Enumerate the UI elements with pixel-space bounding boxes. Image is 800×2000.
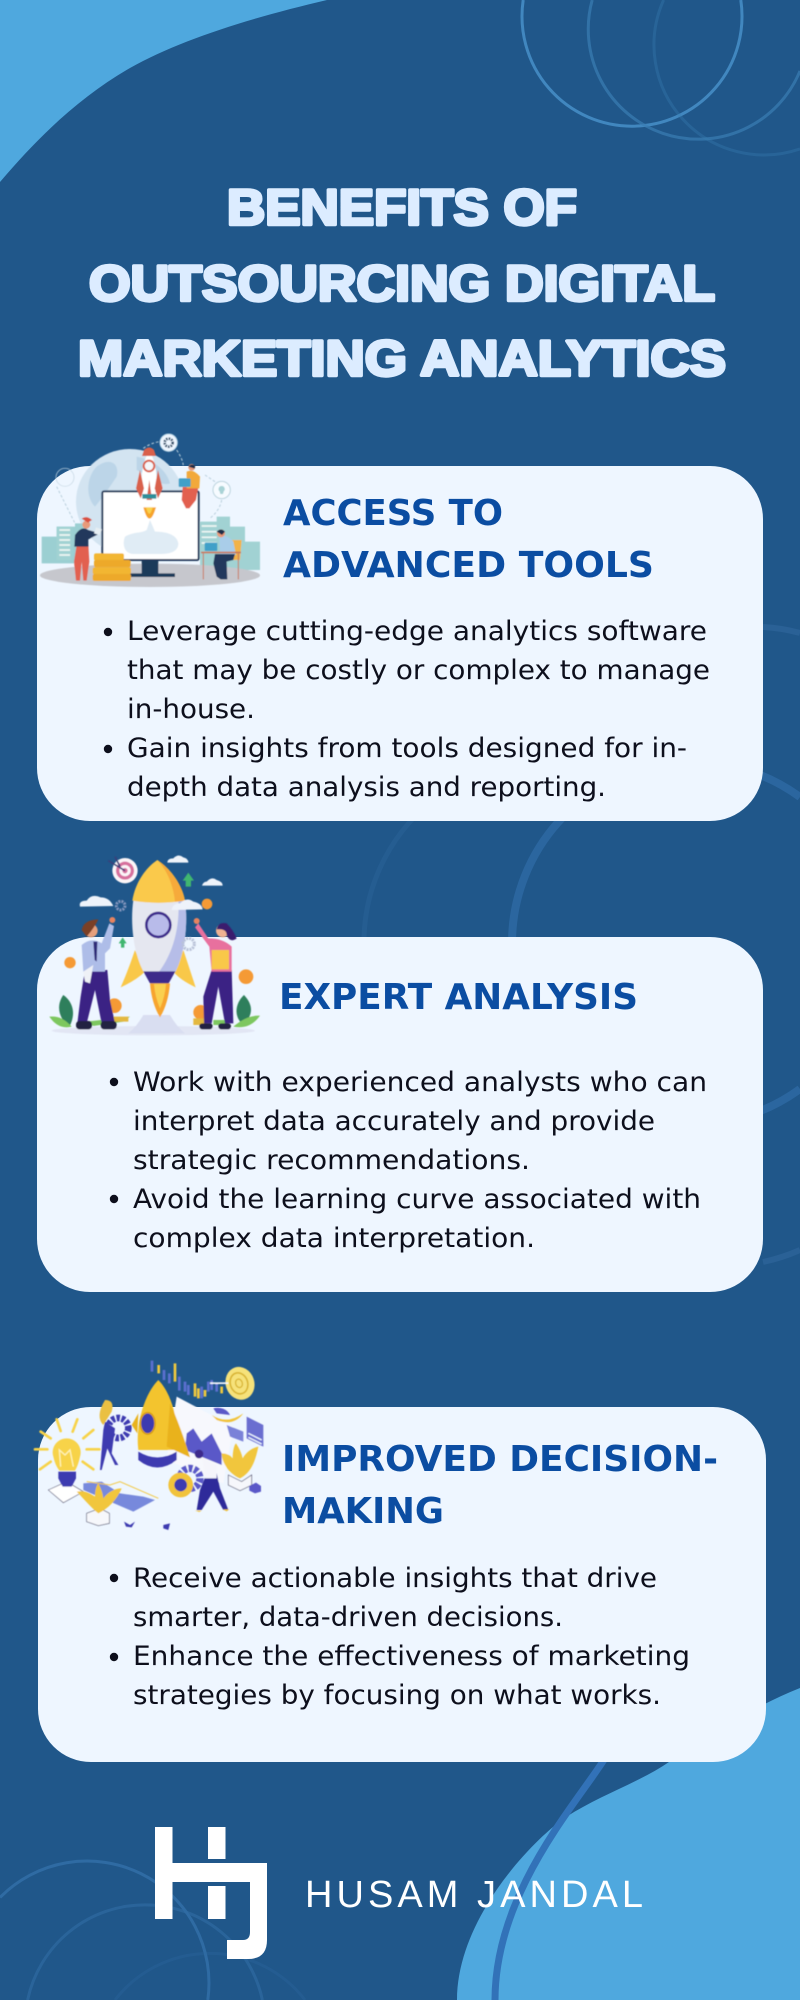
bullet list: [110, 1563, 690, 1711]
bullet list: smarter, data-driven decisions.: [133, 1602, 563, 1633]
card background: [37, 466, 763, 821]
top left blob: [0, 0, 327, 182]
middle background rings: [364, 627, 800, 1262]
blob stripe: [495, 1755, 607, 2000]
top right rings: [522, 0, 800, 155]
bullet list: [104, 616, 710, 803]
bullet list: [110, 1067, 707, 1254]
panel: improved decision-making: [35, 1361, 766, 1762]
bullet list: Gain insights from tools designed for in-: [127, 733, 687, 764]
card background: [37, 937, 763, 1292]
heading: [283, 493, 654, 586]
bullet list: that may be costly or complex to manage: [127, 655, 710, 686]
bullet list: Receive actionable insights that drive: [133, 1563, 657, 1594]
title: [78, 180, 726, 386]
logo wordmark: HUSAM JANDAL: [305, 1874, 643, 1916]
card background: [38, 1407, 766, 1762]
bullet list: strategies by focusing on what works.: [133, 1680, 661, 1711]
heading: EXPERT ANALYSIS: [279, 977, 638, 1018]
bullet list: Avoid the learning curve associated with: [133, 1184, 701, 1215]
heading: IMPROVED DECISION-: [282, 1439, 718, 1480]
illustration: rocket launching from monitor: [40, 434, 260, 587]
title: MARKETING ANALYTICS: [78, 330, 726, 386]
bottom right blob: [457, 1688, 800, 2000]
bullet list: Enhance the effectiveness of marketing: [133, 1641, 690, 1672]
illustration: team with rocket: [49, 856, 260, 1035]
bullet list: strategic recommendations.: [133, 1145, 530, 1176]
title: OUTSOURCING DIGITAL: [89, 256, 715, 312]
logo: [155, 1827, 643, 1959]
heading: [282, 1439, 718, 1532]
bullet list: interpret data accurately and provide: [133, 1106, 655, 1137]
bullet list: in-house.: [127, 694, 255, 725]
heading: ACCESS TO: [283, 493, 503, 534]
panel: access to advanced tools: [37, 434, 763, 821]
logo mark: HJ monogram: [155, 1827, 267, 1959]
bullet list: Leverage cutting-edge analytics software: [127, 616, 707, 647]
illustration: isometric rocket and analytics: [35, 1361, 263, 1530]
bottom left rings: [0, 1861, 305, 2000]
bullet list: depth data analysis and reporting.: [127, 772, 606, 803]
bullet list: Work with experienced analysts who can: [133, 1067, 707, 1098]
bullet list: complex data interpretation.: [133, 1223, 535, 1254]
title: BENEFITS OF: [227, 180, 577, 236]
heading: ADVANCED TOOLS: [283, 545, 654, 586]
panel: expert analysis: [37, 856, 763, 1292]
heading: MAKING: [282, 1491, 444, 1532]
